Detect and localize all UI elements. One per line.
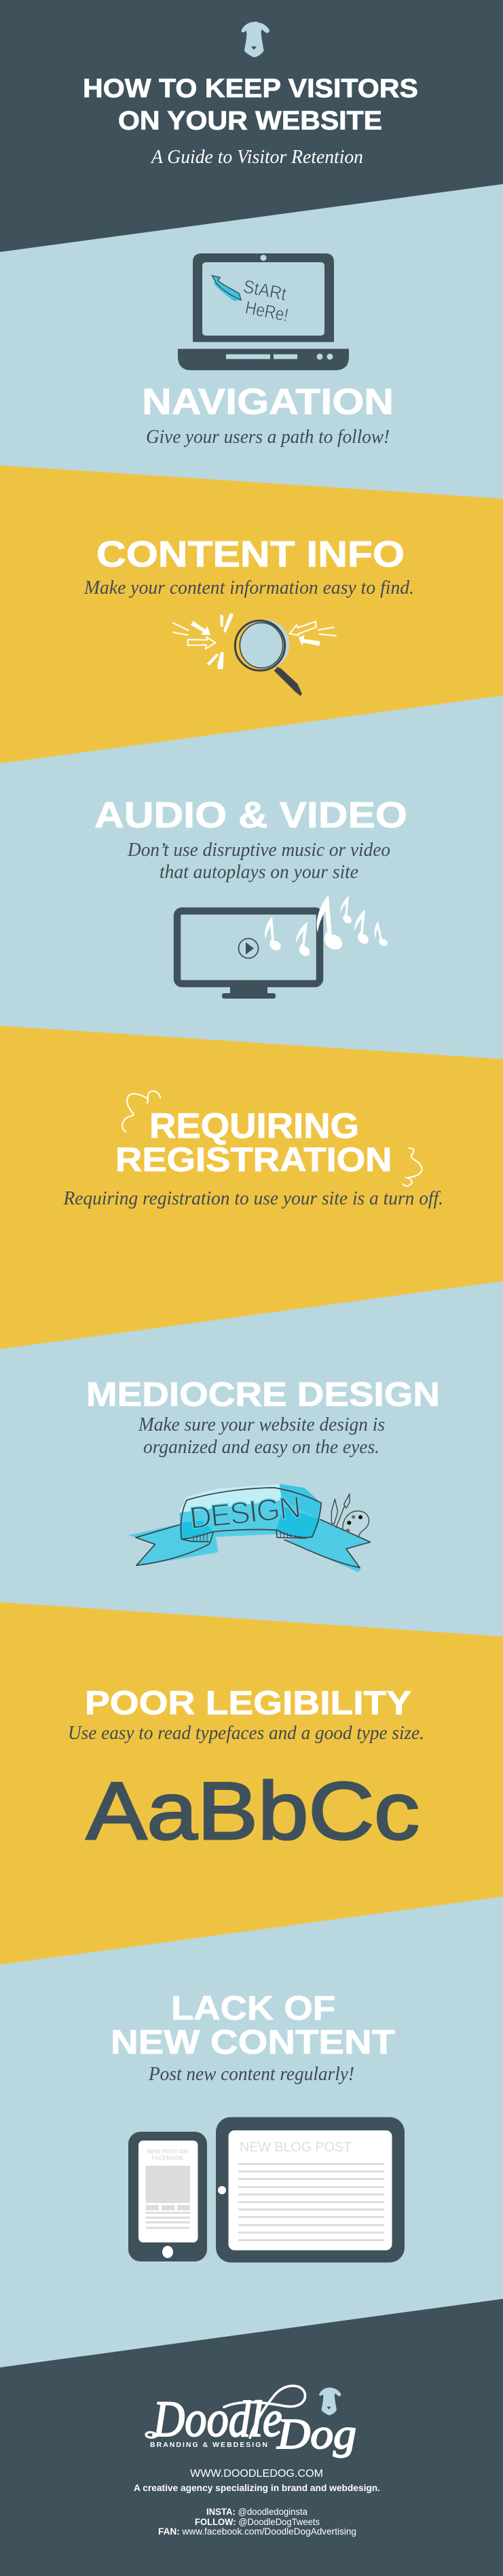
description: Requiring registration to use your site is a turn off. [63,1187,443,1209]
website address: WWW.DOODLEDOG.COM [190,2468,323,2480]
title: HOW TO KEEP VISITORS [83,74,418,103]
ribbon label: DESIGN [188,1489,303,1535]
title: ON YOUR WEBSITE [118,106,382,136]
heading: NEW CONTENT [111,2023,395,2061]
description: Give your users a path to follow! [146,426,390,448]
heading [115,1107,392,1179]
panel: audio and video [0,696,503,1059]
type specimen: AaBbCc [86,1766,420,1857]
icon: hand drawn arrow [212,276,242,301]
social links [158,2507,356,2537]
icon: dog head small [319,2387,341,2415]
panel: poor legibility [0,1602,503,1965]
heading: REGISTRATION [115,1141,392,1179]
description: that autoplays on your site [160,861,358,883]
social links: FOLLOW: @DoodleDogTweets [195,2517,320,2527]
logo: Doodle Dog [146,2386,356,2458]
panel: mediocre design [0,1281,503,1636]
heading: MEDIOCRE DESIGN [86,1375,440,1413]
title [83,74,418,136]
heading: NAVIGATION [142,382,394,423]
icon: tablet [216,2117,405,2262]
description [138,1414,385,1458]
icon: play button [239,939,258,958]
panel: content info [0,465,503,764]
description: organized and easy on the eyes. [143,1436,379,1458]
logo: Doodle Dog: Dog [276,2410,356,2458]
icon: music notes [265,895,388,956]
heading: CONTENT INFO [96,534,405,575]
icon: phone [128,2132,207,2261]
description: Don’t use disruptive music or video [127,839,390,861]
icon: tablet: NEW BLOG POST [240,2140,352,2155]
icon: design ribbon with paint tools [128,1484,371,1572]
panel: lack of new content [0,1897,503,2367]
social links: INSTA: @doodledoginsta [206,2507,308,2517]
logo: Doodle Dog: Doodle [153,2391,282,2448]
panel: footer [0,2299,503,2576]
icon: phone: FACEBOOK [152,2155,183,2162]
description [127,839,390,883]
handwritten label: HeRe! [244,297,290,325]
icon: monitor [177,911,320,999]
subtitle: A Guide to Visitor Retention [150,146,363,168]
heading: AUDIO & VIDEO [94,795,407,836]
heading: POOR LEGIBILITY [85,1685,411,1721]
description: Make your content information easy to find. [83,577,414,598]
description: Post new content regularly! [148,2063,354,2085]
heading [111,1989,395,2061]
handwritten label [242,276,290,325]
description: Make sure your website design is [138,1414,385,1435]
heading: LACK OF [171,1989,335,2027]
icon: phone: NEW POST ON [147,2149,188,2155]
logo: Doodle Dog: BRANDING & WEBDESIGN [150,2441,267,2449]
panel: header [0,0,503,252]
decorative squiggles [122,1091,422,1186]
icon: laptop [178,253,349,370]
heading: REQUIRING [149,1107,359,1146]
tagline: A creative agency specializing in brand and webdesign. [134,2482,380,2493]
description: Use easy to read typefaces and a good type size. [68,1722,424,1744]
panel: navigation [0,184,503,499]
icon: magnifying glass with arrows [172,613,337,696]
icon: dog head [241,22,269,57]
panel: requiring registration [0,1026,503,1349]
handwritten label: StARt [242,276,288,304]
social links: FAN: www.facebook.com/DoodleDogAdvertising [158,2526,356,2537]
